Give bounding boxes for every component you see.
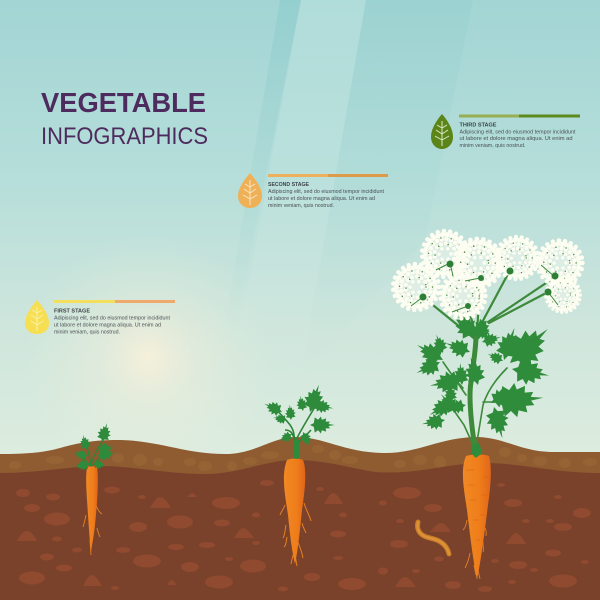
stage text: Adipiscing elit, sed do eiusmod tempor incididunt (268, 189, 385, 195)
soil stones (16, 480, 591, 592)
sun glow (23, 233, 273, 483)
stage text: minim veniam, quis nostrud. (268, 203, 334, 209)
stage text (268, 182, 385, 209)
topsoil speckles (9, 445, 597, 471)
small carrot foliage (73, 421, 116, 472)
stage text: ut labore et dolore magna aliqua. Ut enim ad (460, 136, 573, 142)
plant stems (423, 272, 555, 455)
icon: first stage leaf (25, 300, 49, 334)
topsoil layer (0, 437, 600, 480)
icon: second stage leaf (238, 173, 262, 208)
stage text (460, 122, 576, 149)
stage text: THIRD STAGE (460, 122, 497, 128)
first stage block (25, 300, 175, 336)
plant: small carrot (73, 421, 116, 555)
large carrot crown (471, 443, 482, 456)
plant: medium carrot (261, 382, 335, 566)
medium carrot roots (280, 503, 311, 566)
deep soil layer (0, 460, 600, 600)
title (41, 87, 208, 150)
plant: large carrot with flowers (393, 231, 583, 580)
stage text: ut labore et dolore magna aliqua. Ut enim ad (268, 196, 375, 202)
stage text: minim veniam, quis nostrud. (54, 330, 120, 336)
title: INFOGRAPHICS (41, 123, 208, 150)
stage text (54, 308, 171, 336)
small carrot root body (86, 466, 98, 552)
stage text: minim veniam, quis nostrud. (460, 143, 526, 149)
large carrot roots (463, 520, 486, 579)
small carrot roots (83, 505, 102, 555)
stage text: ut labore et dolore magna aliqua. Ut enim ad (54, 322, 161, 328)
medium carrot foliage (261, 382, 335, 459)
second stage block (238, 173, 388, 209)
light beams (222, 0, 473, 380)
stage text: SECOND STAGE (268, 182, 309, 188)
flower umbels (393, 231, 583, 319)
stage text: Adipiscing elit, sed do eiusmod tempor incididunt (54, 316, 171, 322)
large carrot shading (466, 470, 489, 540)
progress bar (54, 300, 175, 303)
progress bar (268, 174, 388, 177)
large carrot root body (463, 454, 491, 580)
stage text: Adipiscing elit, sed do eiusmod tempor incididunt (460, 130, 576, 136)
title: VEGETABLE (41, 87, 206, 118)
icon: third stage leaf (431, 114, 453, 149)
third stage block (431, 114, 580, 149)
progress bar (459, 114, 580, 118)
medium carrot root body (284, 458, 305, 564)
stage text: FIRST STAGE (54, 308, 90, 314)
plant leaves (412, 306, 559, 441)
icon: earthworm (418, 522, 449, 554)
